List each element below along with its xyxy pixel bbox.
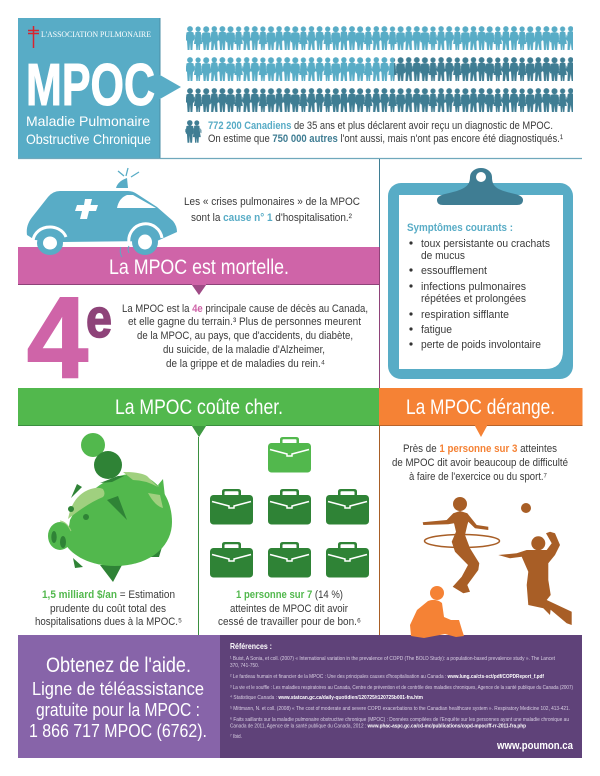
illustration: seated person [410, 586, 464, 638]
website: www.poumon.ca [496, 740, 574, 752]
references list: ⁴ Statistique Canada : www.statcan.gc.ca/daily-quotidien/120725/t120725b001-fra.htm [230, 694, 423, 701]
text: hospitalisation cost [35, 589, 182, 628]
panel: MPOC title block [18, 18, 181, 159]
text: hospitalisation cost: 1,5 milliard $/an = Estimation [42, 589, 175, 601]
symptoms list: toux persistante ou crachats [421, 238, 550, 250]
chart: rows of people silhouettes [186, 26, 573, 112]
references list: ⁷ Ibid. [230, 733, 242, 740]
band: La MPOC est mortelle [18, 247, 379, 295]
panel: symptoms clipboard [388, 168, 573, 379]
references list: ¹ Buist, A Sonia, et coll. (2007) « International variation in the prevalence of COPD (The BOLD Study): a population-based prevalence study ». The Lancet [230, 656, 555, 662]
panel: get help: gratuite pour la MPOC : [36, 700, 200, 720]
symptoms list: respiration sifflante [421, 309, 509, 321]
symptoms list: répétées et prolongées [421, 293, 526, 305]
symptoms list: de mucus [421, 250, 465, 262]
text: hospitalisation cost: hospitalisations dues à la MPOC.⁵ [35, 616, 182, 628]
text: fourth cause of death: de la grippe et de maladies du rein.⁴ [166, 358, 325, 370]
text: exercise difficulty [392, 443, 568, 483]
icon: piggy bank [48, 433, 172, 582]
text: fourth cause of death [122, 303, 368, 370]
symptoms list [409, 238, 550, 351]
subtitle line one: Maladie Pulmonaire [26, 113, 150, 129]
text: stopped working [218, 589, 361, 628]
text: Canadians diagnosed [208, 120, 563, 145]
symptoms list: fatigue [421, 324, 452, 336]
text: hospitalisation cost: prudente du coût total des [50, 603, 166, 615]
references list [230, 656, 573, 740]
text: exercise difficulty: de MPOC dit avoir beaucoup de difficulté [392, 457, 568, 469]
panel: get help: Obtenez de l'aide. [46, 654, 191, 677]
symptoms list: infections pulmonaires [421, 281, 526, 293]
icon: Lorraine cross logo [28, 26, 39, 48]
text: exercise difficulty: Près de 1 personne sur 3 atteintes [403, 443, 557, 455]
band: La MPOC dérange [379, 388, 582, 437]
panel: get help: 1 866 717 MPOC (6762). [29, 721, 207, 741]
organisation name: L'ASSOCIATION PULMONAIRE [41, 30, 151, 39]
references list: ² Le fardeau humain et financier de la MPOC : Une des principales causes d'hospitalisation au Canada : www.lung.ca/cts-sct/pdf/COPDReport_f.pdf [230, 674, 544, 680]
text: stopped working: atteintes de MPOC dit avoir [230, 603, 348, 615]
panel: get help: Ligne de téléassistance [32, 679, 204, 699]
text: hospitalisation cause: Les « crises pulmonaires » de la MPOC [184, 196, 360, 208]
band: La MPOC coûte cher [18, 388, 379, 437]
icon: briefcases, one in seven [210, 437, 369, 578]
text: fourth cause of death: La MPOC est la 4e principale cause de décès au Canada, [122, 303, 368, 315]
symptoms list: essoufflement [421, 265, 487, 277]
text: fourth cause of death: de la MPOC, au pays, que d'accidents, du diabète, [137, 330, 353, 342]
heading: MPOC: MPOC [26, 52, 155, 118]
text: stopped working: 1 personne sur 7 (14 %) [236, 589, 343, 601]
references list: Canada de 2011, Agence de la santé publique du Canada, 2012 : www.phac-aspc.gc.ca/cd-mc/publications/copd-mpoc/ff-rr-2011-fra.php [230, 724, 526, 730]
symptoms heading: Symptômes courants : [407, 222, 513, 234]
big number: 4e: e [86, 287, 112, 349]
band: La MPOC dérange: La MPOC dérange. [406, 396, 555, 419]
symptoms list: perte de poids involontaire [421, 339, 541, 351]
references list: 370, 741-750. [230, 663, 259, 669]
subtitle line two: Obstructive Chronique [26, 131, 151, 147]
text: Canadians diagnosed: On estime que 750 000 autres l'ont aussi, mais n'ont pas encore été diagnostiqués.¹ [208, 133, 563, 145]
illustration: hula hoop woman [423, 497, 500, 593]
illustration: volleyball player and ball [498, 503, 572, 625]
text: hospitalisation cause [184, 196, 360, 224]
icon: clipboard clip [437, 168, 523, 205]
icon: two people [185, 120, 202, 143]
band: La MPOC est mortelle: La MPOC est mortelle. [109, 256, 289, 279]
text: stopped working: cessé de travailler pour de bon.⁶ [218, 616, 361, 628]
panel: get help [18, 635, 220, 758]
panel: references [220, 635, 582, 758]
text: hospitalisation cause: sont la cause n° 1 d'hospitalisation.² [191, 212, 352, 224]
icon: ambulance [27, 168, 177, 257]
text: fourth cause of death: du suicide, de la maladie d'Alzheimer, [163, 344, 325, 356]
text: exercise difficulty: à faire de l'exercice ou du sport.⁷ [409, 471, 547, 483]
big number: 4e: 4 [27, 274, 88, 402]
text: fourth cause of death: et elle gagne du terrain.³ Plus de personnes meurent [128, 316, 361, 328]
band: La MPOC coûte cher: La MPOC coûte cher. [115, 396, 283, 419]
text: Canadians diagnosed: 772 200 Canadiens de 35 ans et plus déclarent avoir reçu un diagnostic de MPOC. [208, 120, 553, 132]
references heading: Références : [230, 642, 272, 651]
